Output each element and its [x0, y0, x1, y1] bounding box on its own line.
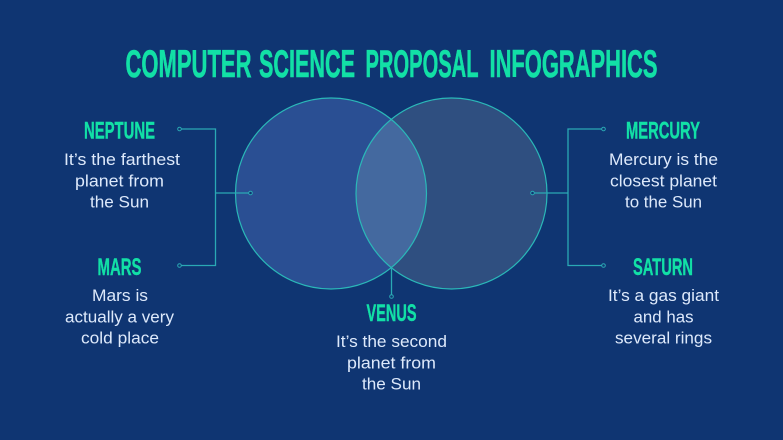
label: mercury: Mercury is the — [609, 150, 718, 169]
label: venus: the Sun — [362, 374, 421, 394]
label: saturn: SATURN — [633, 254, 693, 281]
label: neptune — [64, 118, 180, 212]
label: mercury: MERCURY — [626, 118, 700, 144]
title: SCIENCE — [259, 43, 355, 86]
label: mars: Mars is — [92, 286, 148, 305]
label: mercury — [609, 118, 718, 212]
connector: right bracket — [531, 127, 605, 267]
label: neptune: It’s the farthest — [64, 150, 180, 169]
label: venus: planet from — [347, 354, 436, 372]
label: mars: actually a very — [65, 308, 174, 326]
label: neptune: planet from — [75, 172, 164, 190]
circle outlines — [236, 98, 547, 289]
title: COMPUTER — [126, 43, 252, 86]
connector: venus — [390, 268, 393, 298]
label: mercury: to the Sun — [625, 192, 702, 212]
label: mars — [65, 254, 174, 348]
connector: left bracket — [178, 127, 252, 267]
venn diagram — [236, 98, 547, 289]
label: mercury: closest planet — [610, 172, 717, 190]
label: mars: cold place — [81, 328, 159, 348]
label: venus: VENUS — [366, 300, 416, 327]
circle: left — [236, 98, 426, 289]
title — [126, 43, 658, 86]
label: venus — [336, 300, 447, 394]
label: venus: It’s the second — [336, 332, 447, 351]
title: INFOGRAPHICS — [490, 43, 658, 86]
title: PROPOSAL — [366, 43, 478, 86]
label: saturn — [608, 254, 719, 348]
circle: right — [356, 98, 547, 289]
overlap region — [356, 120, 426, 267]
label: saturn: and has — [634, 308, 694, 326]
label: neptune: NEPTUNE — [84, 118, 155, 144]
label: neptune: the Sun — [90, 192, 149, 212]
label: saturn: It’s a gas giant — [608, 286, 719, 305]
label: mars: MARS — [98, 254, 142, 281]
label: saturn: several rings — [615, 328, 712, 348]
